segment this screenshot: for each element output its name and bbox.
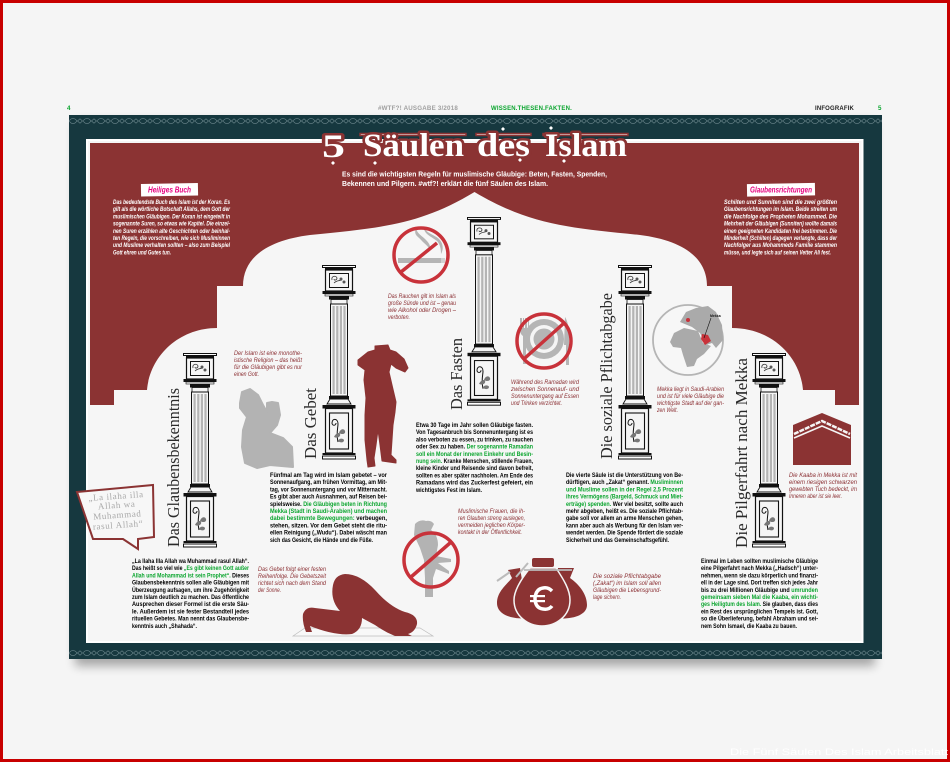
body text: Pilgerfahrt: gemeinsam sieben Mal die Kaaba, ein wichti- (701, 594, 818, 601)
intro text: Bekennen und Pilgern. #wtf?! erklärt die fünf Säulen des Islam. (342, 179, 548, 188)
body text: Fasten: Ramadans wird das Zuckerfest gefeiert, ein (416, 480, 533, 487)
body text: Fasten (415, 422, 533, 494)
body text: Glaubensbekenntnis: Überzeugung aufsagen, um ihre Zugehörigkeit (132, 585, 250, 594)
body text: Fasten: sollten es aber später nachholen. Am Ende des (416, 472, 533, 479)
page header: 5 (878, 105, 882, 112)
callout: monotheistisch: für die Gläubigen gibt es nur (234, 364, 303, 371)
page header (67, 105, 882, 112)
body text: Pflichtabgabe: erträge) spenden. Wer viel besitzt, sollte auch (566, 501, 683, 508)
callout: Zakat: Die soziale Pflichtabgabe (593, 573, 662, 580)
callout: Gebet: Reihenfolge. Die Gebetszeit (258, 573, 326, 580)
body text: Gebet: tag, vor Sonnenuntergang und vor Mitternacht. (270, 486, 387, 493)
body text: Glaubensbekenntnis: rituellen Gebetes. Man nennt das Glaubensbe- (132, 616, 249, 623)
callout: Ramadan: Während des Ramadan wird (511, 379, 579, 386)
callout: Mekka: wichtigste Stadt auf der gan- (657, 400, 724, 407)
speech bubble: La ilaha illa: Allah wa (98, 499, 136, 511)
body text: Pflichtabgabe: und Muslime sollen in der Regel 2,5 Prozent (566, 486, 684, 493)
callout: Ramadan: Sonnenuntergang auf Essen (511, 393, 579, 400)
callout: Mekka (656, 386, 724, 414)
body text: Pflichtabgabe (565, 472, 684, 544)
icon: couple forbidden (404, 520, 458, 597)
sidebar: Heiliges Buch (112, 183, 230, 256)
vertical heading: Die Pilgerfahrt nach Mekka: Die Pilgerfahrt nach Mekka (732, 358, 751, 548)
intro text: Es sind die wichtigsten Regeln für muslimische Gläubige: Beten, Fasten, Spenden, (342, 170, 607, 178)
callout: Körperkontakt: Muslimische Frauen, die ih- (458, 508, 525, 515)
icon: prayer mat (293, 628, 433, 636)
icon: prostrating person (303, 574, 417, 636)
label: Glaubensrichtungen: Glaubensrichtungen (750, 186, 812, 194)
body text: Glaubensbekenntnis: Ausprechen dieser Formel ist die erste Säu- (132, 601, 249, 608)
body text: Pilgerfahrt (701, 558, 818, 630)
panel frame (69, 115, 882, 659)
callout: Rauchen: verboten. (388, 314, 410, 321)
callout: Gebet (258, 566, 326, 594)
callout: monotheistisch (234, 350, 303, 378)
icon: globe with Mekka: Mekka (710, 314, 721, 318)
body text: Pilgerfahrt: ein Rest des ursprünglichen Tempels ist. Gott, (701, 608, 818, 615)
watermark: Die Fünf Säulen Des Islam Arbeitsblatt (730, 747, 949, 757)
body text: Glaubensbekenntnis: kenntnis auch „Shahada“. (132, 623, 197, 630)
body text: Glaubensbekenntnis: Das heißt so viel wie „Es gibt keinen Gott außer (132, 565, 249, 572)
body text: Glaubensbekenntnis: le. Außerdem ist sie fester Bestandteil jedes (132, 608, 249, 615)
column 3: Fasten (468, 217, 500, 405)
icon: globe with Mekka (653, 305, 723, 375)
body text: Pilgerfahrt: nem Sohn Ismael, die Kaaba zu bauen. (701, 623, 797, 630)
body text: Gebet: spielsweise. Die Gläubigen beten in Richtung (270, 501, 387, 508)
body text: Glaubensbekenntnis (132, 558, 250, 630)
body text: Pflichtabgabe: ihres Vermögens (Bargeld, Schmuck und Miet- (566, 494, 683, 501)
page header: #WTF?! AUSGABE 3/2018 (378, 105, 458, 112)
body text: Pflichtabgabe: dürftigen, auch „Zakat“ genannt. Musliminnen (566, 479, 683, 486)
sidebar: Heiliges Buch: gilt als die wörtliche Botschaft Allahs, dem Gott der (112, 206, 230, 213)
callout: Zakat: („Zakat“) im Islam soll allen (593, 580, 662, 587)
icon: standing person praying (358, 345, 408, 467)
title: des (477, 128, 530, 164)
body text: Glaubensbekenntnis: „La Ilaha Illa Allah wa Muhammad rasul Allah“. (132, 558, 249, 565)
callout: Mekka: zen Welt. (656, 407, 678, 414)
callout: Körperkontakt (458, 508, 525, 536)
sidebar: Glaubensrichtungen: Glaubensrichtungen im Islam. Beide streiten um (724, 206, 837, 213)
callout: monotheistisch: Der Islam ist eine monothe- (234, 350, 302, 357)
body text: Pilgerfahrt: Einmal im Leben sollten muslimische Gläubige (701, 558, 818, 565)
maroon arch backdrop (90, 143, 859, 405)
callout: Ramadan: und Trinken verzichtet. (511, 400, 562, 407)
body text: Pflichtabgabe: Sicherheit und das Gemeinschaftsgefühl. (566, 537, 669, 544)
title: 5 (322, 129, 345, 165)
body text: Pflichtabgabe: gabe soll vor allem an arme Menschen gehen, (566, 515, 683, 522)
icon: no smoking (394, 228, 448, 282)
speech bubble: La ilaha illa (77, 485, 154, 549)
column 5: Pilgerfahrt (752, 354, 786, 547)
callout: Körperkontakt: vermeiden jeglichen Körper- (458, 522, 525, 529)
title: Säulen (363, 128, 464, 164)
body text: Fasten: oder Sex zu haben. Der sogenannte Ramadan (416, 444, 533, 451)
vertical heading: Das Gebet: Das Gebet (301, 388, 320, 459)
vertical heading: Das Fasten: Das Fasten (447, 338, 466, 410)
body text: Gebet: dabei bestimmte Bewegungen: verbeugen, (270, 515, 387, 522)
label: Heiliges Buch: Heiliges Buch (148, 186, 191, 194)
page header: WISSEN.THESEN.FAKTEN. (491, 105, 572, 112)
body text: Fasten: also verboten zu essen, zu trinken, zu rauchen (416, 436, 533, 443)
sidebar: Glaubensrichtungen: einen geeigneten Kandidaten frei bestimmen. Die (724, 228, 837, 235)
icon: kneeling person (240, 389, 293, 468)
intro text (342, 170, 607, 188)
callout: Kaaba: Inneren aber ist sie leer. (789, 493, 842, 500)
body text: Pflichtabgabe: wendet werden. Die Spende fördert die soziale (565, 530, 683, 537)
sidebar: Heiliges Buch: und Muslime verhalten sollten – also zum Beispiel (113, 242, 230, 249)
body text: Fasten: Etwa 30 Tage im Jahr sollen Gläubige fasten. (416, 422, 533, 429)
body text: Pilgerfahrt: ell in der Lage sind. Dort treffen sich jedes Jahr (701, 580, 818, 587)
panel shadow (75, 122, 875, 666)
body text: Gebet: stehen, sitzen. Vor dem Gebet steht die ritu- (270, 522, 387, 529)
page header: INFOGRAFIK (815, 105, 854, 112)
page header: 4 (67, 105, 71, 112)
body text: Glaubensbekenntnis: Allah und Mohammad ist sein Prophet“. Dieses (132, 572, 249, 579)
sidebar: Heiliges Buch: Gott ehren und Gutes tun. (113, 249, 171, 256)
callout: Ramadan: zwischen Sonnenauf- und (510, 386, 580, 393)
callout: Kaaba: gewebten Tuch bedeckt, im (789, 486, 857, 493)
callout: Mekka: und ist für viele Gläubige die (657, 393, 724, 400)
sidebar: Glaubensrichtungen: Schiiten und Sunniten sind die zwei größten (724, 199, 837, 206)
body text: Gebet: Es gibt aber auch Ausnahmen, auf Reisen bei- (270, 494, 387, 501)
callout: Kaaba: Die Kaaba in Mekka ist mit (789, 472, 857, 479)
icon: no eating (517, 314, 571, 368)
body text: Pflichtabgabe: Die vierte Säule ist die Unterstützung von Be- (566, 472, 683, 479)
body text: Fasten: soll ein Monat der inneren Einkehr und Besin- (416, 451, 533, 458)
title (322, 126, 628, 165)
callout: Zakat: Gläubigen die Lebensgrund- (593, 587, 661, 594)
body text: Pilgerfahrt: nehmen, wenn sie dazu körperlich und finanzi- (701, 572, 818, 579)
title: Islam (545, 128, 627, 164)
body text: Pilgerfahrt: ges Heiligtum des Islam. Sie glauben, dass dies (701, 601, 818, 608)
body text: Gebet: Fünfmal am Tag wird im Islam gebetet – vor (270, 472, 387, 479)
body text: Pflichtabgabe: mehr abgeben, heißt es. Die soziale Pflichtab- (566, 508, 683, 515)
sidebar: Glaubensrichtungen: Minderheit (Schiiten) dagegen verlangte, dass der (724, 235, 837, 242)
body text: Glaubensbekenntnis: zum Islam deutlich zu machen. Das öffentliche (132, 594, 249, 601)
speech bubble: La ilaha illa: „La ilaha illa (88, 489, 144, 503)
body text: Gebet: sich das Gesicht, die Hände und die Füße. (270, 537, 373, 544)
sidebar: Glaubensrichtungen: die Nachfolge des Propheten Mohammed. Die (724, 213, 837, 220)
callout: Gebet: der Sonne. (258, 587, 281, 594)
body text: Glaubensbekenntnis: Glaubensbekenntnis sollen alle Gläubigen mit (132, 580, 250, 587)
body text: Fasten: Von Tagesanbruch bis Sonnenuntergang ist es (416, 429, 533, 436)
speech bubble: La ilaha illa: rasul Allah“ (93, 518, 144, 532)
callout: Kaaba (789, 472, 858, 500)
sidebar: Glaubensrichtungen: müsse, und legte sich auf seinen Vetter Ali fest. (724, 249, 831, 256)
column 2: Gebet (322, 266, 356, 459)
sidebar: Heiliges Buch: sogenannte Suren, so etwas wie Kapitel. Die einzel- (113, 221, 230, 228)
body text: Fasten: wichtigstes Fest im Islam. (415, 487, 482, 494)
callout: Körperkontakt: ren Glauben streng auslegen, (458, 515, 525, 522)
sidebar: Heiliges Buch: nen Suren erzählen alte Geschichten oder beinhal- (113, 228, 230, 235)
callout: Kaaba: einem riesigen schwarzen (789, 479, 858, 486)
callout: Ramadan (510, 379, 580, 407)
vertical heading: Das Glaubensbekenntnis: Das Glaubensbekenntnis (164, 388, 183, 547)
callout: Rauchen (388, 293, 457, 321)
callout: Körperkontakt: kontakt in der Öffentlichkeit. (458, 529, 522, 536)
callout: monotheistisch: einen Gott. (234, 371, 259, 378)
icon: Kaaba (793, 413, 851, 465)
body text: Pilgerfahrt: so die Überlieferung, befahl Abraham und sei- (701, 614, 818, 623)
sidebar: Heiliges Buch: ten Regeln, die vorschreiben, wie sich Musliminnen (113, 235, 230, 242)
body text: Gebet: Mekka (Stadt in Saudi-Arabien) und machen (270, 508, 387, 515)
body text: Fasten: nung sein. Kranke Menschen, stillende Frauen, (416, 458, 533, 465)
icon: money bags (497, 558, 587, 626)
body text: Fasten: kleine Kinder und Reisende sind davon befreit, (416, 465, 533, 472)
column 1: Glaubensbekenntnis (184, 354, 216, 547)
callout: Mekka: Mekka liegt in Saudi-Arabien (657, 386, 724, 393)
sidebar: Heiliges Buch: Das bedeutendste Buch des Islam ist der Koran. Es (113, 199, 230, 206)
sidebar: Heiliges Buch: muslimischen Gläubigen. Der Koran ist eingeteilt in (113, 213, 230, 220)
column 4: Pflichtabgabe (618, 266, 652, 459)
body text: Pilgerfahrt: eine Pilgerfahrt nach Mekka („Hadsch“) unter- (701, 565, 818, 572)
body text: Gebet: Sonnenaufgang, am frühen Vormittag, am Mit- (270, 479, 387, 486)
speech bubble: La ilaha illa: Muhammad (93, 508, 142, 522)
vertical heading: Die soziale Pflichtabgabe: Die soziale Pflichtabgabe (597, 293, 616, 459)
callout: Gebet: richtet sich nach dem Stand (258, 580, 326, 587)
callout: monotheistisch: istische Religion – das heißt (234, 357, 302, 364)
body text: Pflichtabgabe: kann aber auch als Werbung für den Islam ver- (566, 522, 683, 529)
sidebar: Glaubensrichtungen: Nachfolger aus Mohammeds Familie stammen (724, 242, 837, 249)
callout: Zakat (593, 573, 662, 601)
sidebar: Glaubensrichtungen (724, 183, 837, 256)
body text: Gebet: ellen Reinigung („Wudu“). Dabei wäscht man (270, 530, 387, 537)
body text: Pilgerfahrt: bis zu drei Millionen Gläubige und umrunden (701, 587, 818, 594)
sidebar: Glaubensrichtungen: Mehrheit der Gläubigen (Sunniten) wollte damals (724, 221, 837, 228)
callout: Gebet: Das Gebet folgt einer festen (258, 566, 326, 573)
body text: Gebet (270, 472, 387, 544)
callout: Rauchen: große Sünde und ist – genau (388, 300, 456, 307)
callout: Rauchen: wie Alkohol oder Drogen – (388, 307, 457, 314)
callout: Zakat: lage sichern. (593, 594, 621, 601)
callout: Rauchen: Das Rauchen gilt im Islam als (388, 293, 456, 300)
